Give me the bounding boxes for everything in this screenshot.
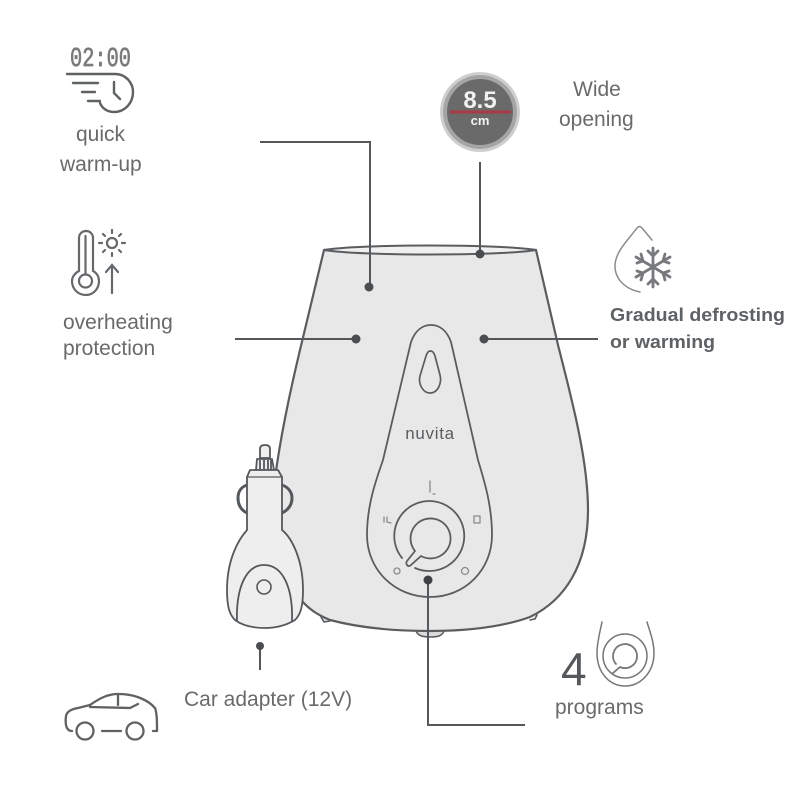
leader line: overheating protection — [235, 334, 360, 344]
adapter collar line — [247, 476, 282, 478]
numeral four: 4 — [561, 643, 587, 695]
side clips — [238, 485, 292, 513]
label: gradual defrosting or warming: or warming — [610, 332, 715, 352]
program icons on dial — [384, 481, 480, 574]
label: wide opening: opening — [559, 108, 634, 131]
label: wide opening: Wide — [573, 78, 621, 101]
timer digits: 02:00 — [70, 45, 131, 75]
car adapter illustration — [227, 445, 303, 628]
dial knob with handle — [406, 518, 451, 566]
badge measure line — [450, 110, 511, 114]
leader line: quick warm-up — [260, 142, 374, 292]
adapter housing — [227, 470, 303, 628]
inner arch — [237, 565, 292, 621]
icon: four programs dial — [561, 622, 654, 695]
clock and speed lines — [67, 74, 133, 112]
label: overheating protection: protection — [63, 337, 155, 360]
label: gradual defrosting or warming: Gradual defrosting — [610, 305, 785, 325]
label: overheating protection: overheating — [63, 311, 173, 334]
adapter tip — [260, 445, 270, 458]
warmer shell — [272, 250, 588, 631]
label: car adapter: Car adapter (12V) — [184, 688, 352, 711]
label: quick warm-up: warm-up — [59, 153, 142, 176]
icon: 8.5 cm opening badge — [440, 72, 520, 152]
icon: fast timer — [67, 45, 133, 112]
badge value: 8.5 — [463, 87, 497, 114]
leader line: 4 programs — [424, 576, 525, 725]
leader line: gradual defrosting — [480, 334, 598, 344]
knurled nut — [256, 459, 274, 470]
label: programs: programs — [555, 696, 644, 719]
mini dial outline — [597, 622, 654, 686]
top rim — [324, 246, 536, 254]
icon: thermometer with sun — [72, 230, 125, 295]
brand name: nuvita — [405, 424, 455, 443]
leader line: car adapter — [256, 642, 264, 670]
product: bottle warmer body — [272, 246, 588, 637]
icon: drop with snowflake — [615, 226, 670, 292]
icon: car — [66, 694, 157, 740]
base feet — [321, 615, 537, 637]
leader line: wide opening — [476, 162, 484, 258]
front teardrop panel — [367, 325, 492, 597]
indicator drop — [420, 351, 441, 393]
dial ring — [394, 501, 464, 571]
label: quick warm-up: quick — [76, 123, 126, 146]
badge unit: cm — [471, 113, 489, 128]
button — [257, 580, 271, 594]
